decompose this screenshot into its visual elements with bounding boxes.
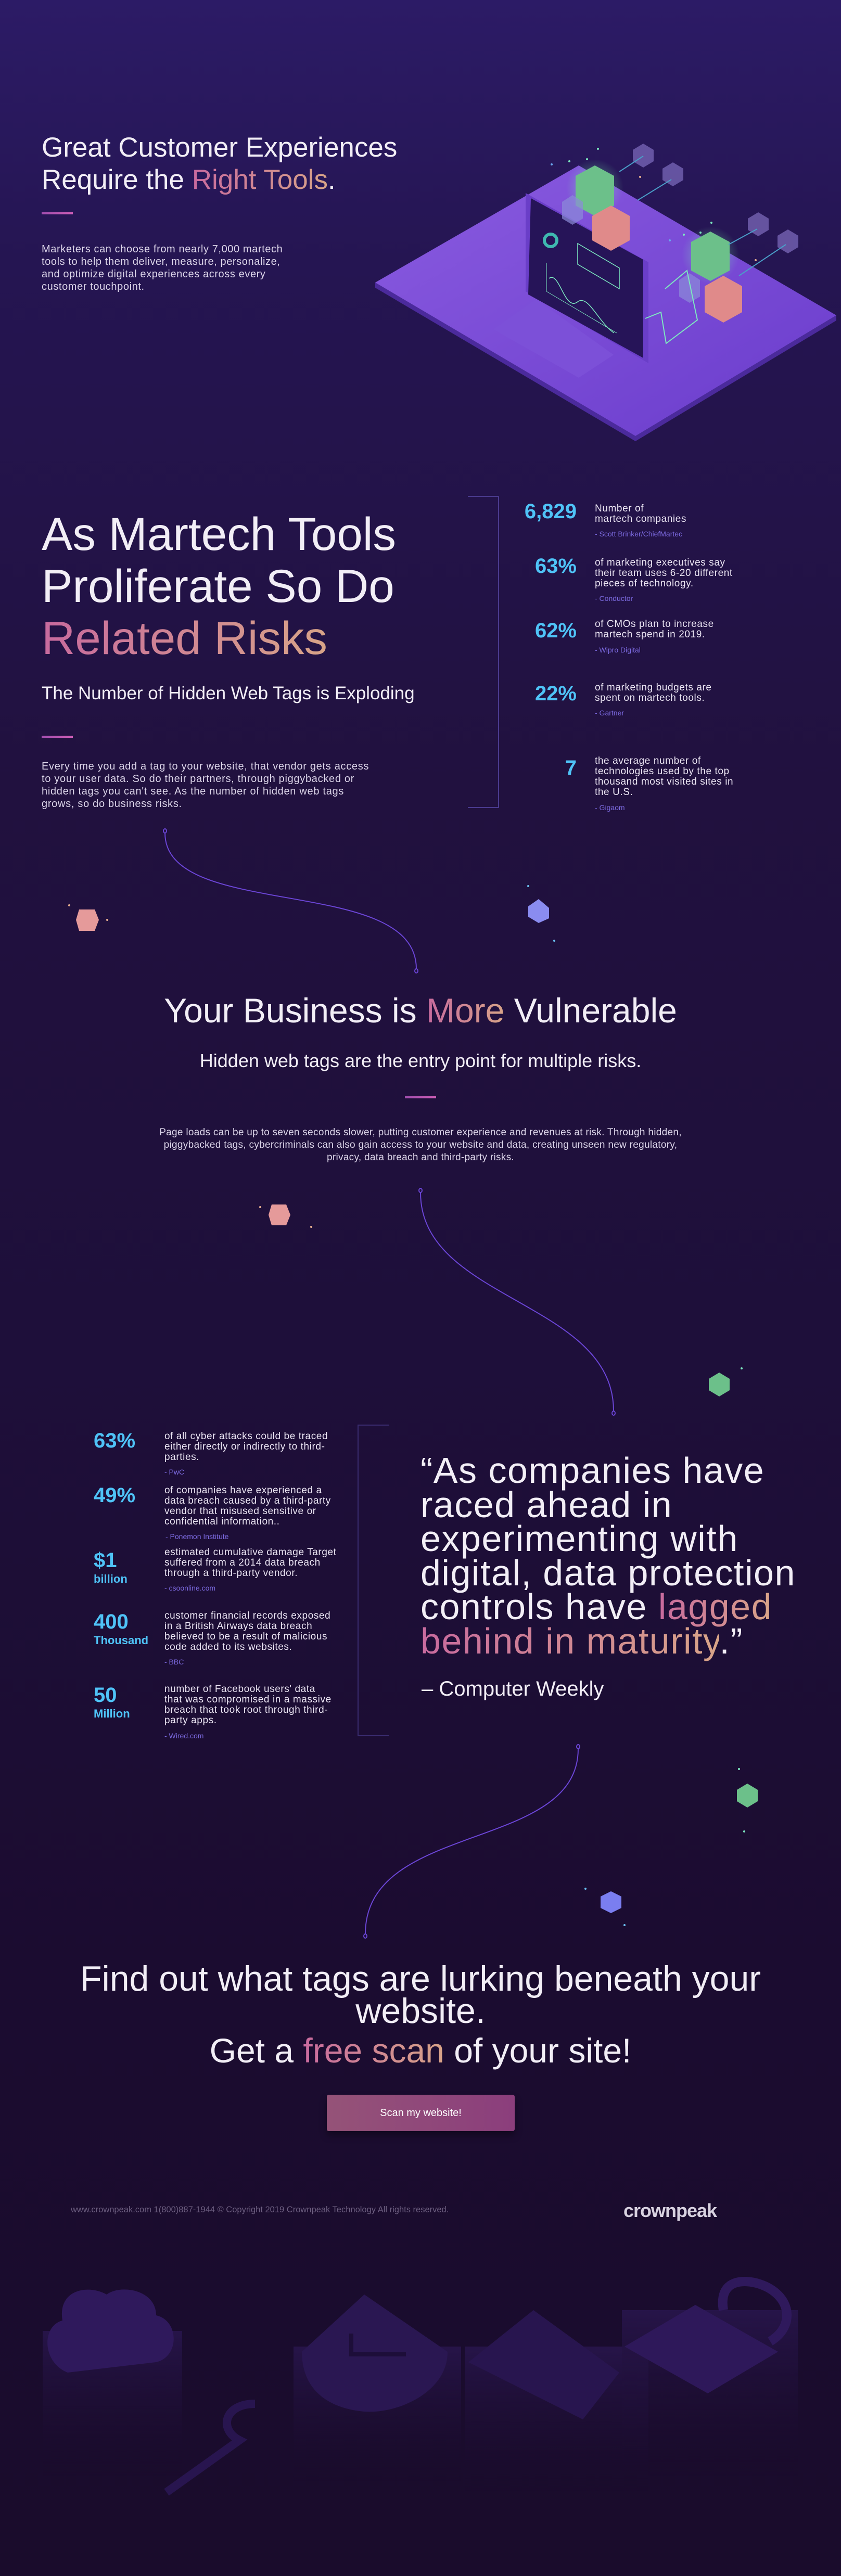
quote: digital, data protection bbox=[420, 1553, 796, 1593]
call to action heading bbox=[80, 1959, 761, 2031]
stats list 2: 63% bbox=[94, 1429, 135, 1452]
stats list 1: 22% bbox=[535, 682, 577, 705]
stats list 2: $1 bbox=[94, 1549, 117, 1572]
stats list 1: technologies used by the top bbox=[595, 766, 730, 777]
title: Great Customer Experiences: Require the Right Tools. bbox=[42, 164, 336, 195]
paragraph: tags: hidden tags you can't see. As the number of hidden web tags bbox=[42, 786, 344, 797]
quote: “As companies have bbox=[420, 1450, 764, 1491]
stats list 2: Thousand bbox=[94, 1634, 148, 1647]
quote: behind in maturity.” bbox=[420, 1620, 743, 1661]
stats list 2: either directly or indirectly to third- bbox=[164, 1441, 325, 1452]
stats list 2: confidential information.. bbox=[164, 1516, 280, 1527]
heading: As Martech Tools Proliferate: Related Risks bbox=[42, 612, 327, 664]
call to action heading: Find out what tags are lurking beneath your bbox=[80, 1959, 761, 1998]
stats list 2: of all cyber attacks could be traced bbox=[164, 1431, 328, 1442]
stats list 2: Million bbox=[94, 1707, 130, 1720]
stats list 2: vendor that misused sensitive or bbox=[164, 1506, 316, 1517]
stats list 2: customer financial records exposed bbox=[164, 1610, 330, 1621]
stats list 2: number of Facebook users' data bbox=[164, 1684, 315, 1695]
paragraph: page loads: piggybacked tags, cybercriminals can also gain access to your website and data, creating unseen new regulatory, bbox=[164, 1139, 677, 1150]
stats list 2: billion bbox=[94, 1572, 128, 1585]
stats list 2: estimated cumulative damage Target bbox=[164, 1547, 337, 1558]
stats list 1: 62% bbox=[535, 619, 577, 642]
heading: As Martech Tools Proliferate: Proliferate So Do bbox=[42, 560, 394, 612]
stats list 2: that was compromised in a massive bbox=[164, 1694, 332, 1705]
stats list 1 bbox=[525, 500, 733, 812]
stats list 2: 50 bbox=[94, 1684, 117, 1707]
text: Get a free scan of your site! bbox=[210, 2031, 631, 2070]
intro paragraph: tools to help them deliver, measure, personalize, bbox=[42, 256, 281, 267]
stats list 1: their team uses 6-20 different bbox=[595, 568, 733, 579]
stats list 2: - Wired.com bbox=[164, 1732, 203, 1740]
stats list 1: - Gartner bbox=[595, 709, 624, 717]
stats list 1: pieces of technology. bbox=[595, 578, 694, 589]
stats bracket 1 bbox=[468, 496, 499, 808]
stats list 1: martech companies bbox=[595, 514, 686, 524]
stats list 1: martech spend in 2019. bbox=[595, 629, 705, 640]
stats list 1: of marketing executives say bbox=[595, 557, 725, 568]
stats list 2: through a third-party vendor. bbox=[164, 1568, 298, 1579]
stats list 1: - Conductor bbox=[595, 594, 633, 603]
stats list 2: parties. bbox=[164, 1452, 199, 1463]
stats list 2: suffered from a 2014 data breach bbox=[164, 1557, 321, 1568]
stats bracket 2 bbox=[358, 1425, 389, 1736]
paragraph: tags: grows, so do business risks. bbox=[42, 798, 182, 810]
button: scan my website bbox=[327, 2095, 515, 2131]
stats list 2: - BBC bbox=[164, 1658, 184, 1666]
paragraph: tags: to your user data. So do their partners, through piggybacked or bbox=[42, 773, 354, 785]
stats list 2: - csoonline.com bbox=[164, 1584, 215, 1592]
stats list 1: the U.S. bbox=[595, 787, 633, 798]
stats list 2 bbox=[94, 1429, 337, 1740]
stats list 2: - Ponemon Institute bbox=[165, 1532, 228, 1541]
quote bbox=[420, 1450, 796, 1661]
subheading: hidden web tags: Hidden web tags are the entry point for multiple risks. bbox=[200, 1050, 641, 1071]
stats list 1: spent on martech tools. bbox=[595, 693, 705, 703]
intro paragraph: customer touchpoint. bbox=[42, 281, 145, 292]
stats list 1: Number of bbox=[595, 503, 644, 514]
stats list 2: 400 bbox=[94, 1610, 129, 1633]
intro paragraph bbox=[42, 243, 283, 292]
quote: experimenting with bbox=[420, 1518, 738, 1559]
stats list 1: - Wipro Digital bbox=[595, 646, 641, 654]
stats list 1: - Gigaom bbox=[595, 803, 625, 812]
paragraph: tags: Every time you add a tag to your website, that vendor gets access bbox=[42, 761, 369, 772]
stats list 2: code added to its websites. bbox=[164, 1642, 292, 1652]
quote attribution: – Computer Weekly bbox=[422, 1677, 604, 1700]
title: Great Customer Experiences bbox=[42, 132, 397, 195]
intro paragraph: Marketers can choose from nearly 7,000 martech bbox=[42, 243, 283, 255]
stats list 2: party apps. bbox=[164, 1715, 217, 1726]
stats list 1: 63% bbox=[535, 555, 577, 578]
stats list 2: - PwC bbox=[164, 1468, 184, 1476]
quote: raced ahead in bbox=[420, 1484, 672, 1524]
decorative security icons bbox=[43, 2277, 798, 2495]
stats list 1: of marketing budgets are bbox=[595, 682, 712, 693]
paragraph: page loads bbox=[159, 1127, 682, 1163]
heading: As Martech Tools Proliferate bbox=[42, 508, 396, 664]
stats list 2: breach that took root through third- bbox=[164, 1704, 328, 1715]
stats list 2: data breach caused by a third-party bbox=[164, 1495, 331, 1506]
button: scan my website: Scan my website! bbox=[380, 2107, 462, 2119]
stats list 1: - Scott Brinker/ChiefMartec bbox=[595, 530, 682, 538]
stats list 2: 49% bbox=[94, 1484, 135, 1507]
title: Great Customer Experiences: Great Customer Experiences bbox=[42, 132, 397, 163]
heading: Your Business is More Vulnerable: Your Business is More Vulnerable bbox=[164, 991, 677, 1030]
illustration: isometric workstation bbox=[375, 144, 836, 441]
stats list 2: believed to be a result of malicious bbox=[164, 1631, 327, 1642]
paragraph: page loads: privacy, data breach and third-party risks. bbox=[327, 1152, 514, 1163]
logo: crownpeak: crownpeak bbox=[623, 2200, 717, 2221]
stats list 2: in a British Airways data breach bbox=[164, 1621, 312, 1632]
stats list 1: 7 bbox=[565, 757, 577, 779]
quote: controls have lagged bbox=[420, 1586, 772, 1627]
paragraph: page loads: Page loads can be up to seven seconds slower, putting customer experience and revenues at risk. Through hidden, bbox=[159, 1127, 682, 1138]
footer text: www.crownpeak.com 1(800)887-1944 © Copyright 2019 Crownpeak Technology All rights reserved. bbox=[71, 2205, 449, 2214]
stats list 1: the average number of bbox=[595, 755, 701, 766]
paragraph: tags bbox=[42, 761, 369, 810]
stats list 1: 6,829 bbox=[525, 500, 577, 523]
call to action heading: website. bbox=[355, 1991, 486, 2031]
subheading: The Number of Hidden Web Tags is Exploding bbox=[42, 683, 415, 703]
stats list 1: of CMOs plan to increase bbox=[595, 619, 714, 630]
stats list 1: thousand most visited sites in bbox=[595, 776, 733, 787]
stats list 2: of companies have experienced a bbox=[164, 1485, 322, 1496]
intro paragraph: and optimize digital experiences across every bbox=[42, 268, 266, 280]
heading: As Martech Tools Proliferate: As Martech Tools bbox=[42, 508, 396, 560]
